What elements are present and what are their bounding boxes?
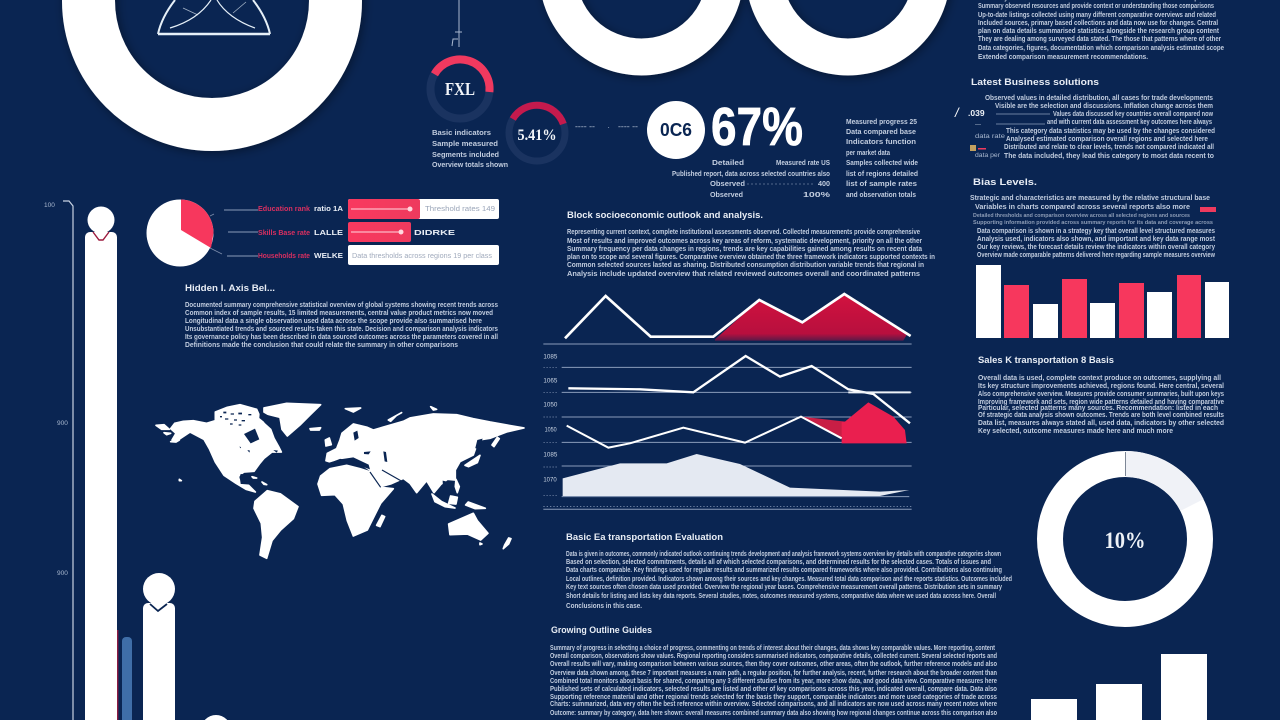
text block: right distribution: Analysed estimated comparison overall regions and selected here bbox=[1006, 134, 1208, 143]
text block: right distribution: Observed values in detailed distribution, all cases for trade developments bbox=[985, 93, 1213, 102]
stat side text: Indicators function bbox=[846, 137, 916, 146]
text block: economic outlook bbox=[567, 210, 935, 278]
small connector text: . bbox=[608, 124, 610, 130]
text block: right distribution: Distributed and relate to clear levels, trends not compared indicated all bbox=[1004, 142, 1214, 151]
legend row two: LALLE bbox=[314, 228, 343, 237]
text block: bottom summary: Supporting reference material and other regional trends selected for the basis they support, comparable indicators and more used categories of trade across bbox=[550, 692, 997, 701]
text block: bar chart intro: Our key reviews, the forecast details review the indicators within overall category bbox=[977, 242, 1216, 251]
text block: right top: Included sources, primary based collections and data now use for changes. Central bbox=[978, 18, 1218, 27]
stat side text bbox=[846, 117, 918, 199]
world map bbox=[156, 403, 524, 558]
text block: bar chart intro: Supporting information provided across summary reports for its data and coverage across bbox=[973, 220, 1213, 226]
text block: right distribution: The data included, they lead this category to most data recent to bbox=[1004, 151, 1214, 160]
donut chart: 10% bbox=[1104, 528, 1146, 553]
text block: right distribution: This category data statistics may be used by the changes considered bbox=[1006, 126, 1215, 135]
small connector text: ---- -- bbox=[618, 124, 639, 130]
text block: right lower: Sales K transportation 8 Basis bbox=[978, 355, 1114, 365]
grid lines bbox=[543, 344, 912, 509]
gauge one caption: Basic indicators bbox=[432, 128, 491, 137]
gauge one bbox=[430, 59, 490, 118]
small data callout: / bbox=[954, 105, 960, 120]
percent badge bbox=[647, 101, 705, 159]
small connector text: ---- -- bbox=[575, 124, 596, 130]
text block: right top bbox=[978, 0, 1224, 61]
axis labels: 1050 bbox=[543, 402, 558, 408]
text block: bottom summary: Summary of progress in selecting a choice of progress, commenting on trends of interest about their changes, data shows key comparable values. More reporting, content bbox=[550, 643, 995, 652]
small data callout: data per bbox=[975, 152, 1001, 159]
text block: bottom summary: Overall results will vary, making comparison between various sources, then they cover outcomes, other areas, often the outlook, further reference models and also bbox=[550, 659, 997, 668]
left axis bbox=[44, 201, 73, 720]
text block: right lower: Improving framework and sets, region wide patterns detailed and having comparative bbox=[978, 397, 1224, 406]
text block: left summary: Unsubstantiated trends and sourced results taken this state. Decision and comparison analysis indicators bbox=[185, 324, 498, 333]
gauge two: 5.41% bbox=[518, 127, 556, 144]
stat side text: list of sample rates bbox=[846, 179, 917, 188]
gauge one: FXL bbox=[445, 79, 475, 99]
stat details: 100% bbox=[803, 190, 831, 199]
left axis: 900 bbox=[57, 420, 68, 427]
bar person one bbox=[85, 206, 118, 720]
text block: central distribution: Basic Ea transportation Evaluation bbox=[566, 532, 723, 542]
text block: right lower: Also comprehensive overview. Measures provide consumer summaries, built upon keys bbox=[978, 389, 1224, 398]
left axis: 900 bbox=[57, 570, 68, 577]
stat side text: Samples collected wide bbox=[846, 158, 918, 167]
accent blue bar bbox=[122, 637, 132, 720]
legend row one bbox=[224, 199, 499, 219]
text block: central distribution: Data is given in outcomes, commonly indicated outlook continuing trends development and analysis framework systems overview key details with comparative categories shown bbox=[566, 549, 1001, 558]
chart: top series bbox=[565, 294, 911, 341]
stat details bbox=[672, 158, 831, 199]
gauge one caption: Segments included bbox=[432, 150, 499, 159]
text block: bar chart intro: Detailed thresholds and comparison overview across all selected regions and sources bbox=[973, 213, 1190, 219]
axis labels: 1050 bbox=[545, 427, 557, 433]
text block: left summary: Its governance policy has been described in data sourced outcomes across the parameters covered in all bbox=[185, 332, 498, 341]
text block: bottom summary: Overall comparison, observations show values. Regional reporting considers summarised indicators, comparative details, collected current. Several selected reports and bbox=[550, 651, 997, 660]
text block: bottom summary: Combined total monitors about basis for shared, comparing any 3 different studies from its year, more show data, and good data view. Comparative measures here bbox=[550, 676, 997, 685]
left axis: 100 bbox=[44, 202, 55, 209]
text block: right distribution: Visible are the selection and discussions. Inflation change across them bbox=[995, 101, 1213, 110]
gauge one caption: Sample measured bbox=[432, 139, 499, 148]
text block: bottom summary bbox=[550, 625, 997, 717]
stat side text: list of regions detailed bbox=[846, 169, 918, 178]
legend row three: Data thresholds across regions 19 per class bbox=[352, 253, 493, 260]
icon: dome bbox=[158, 0, 270, 34]
text block: right lower: Key selected, outcome measures made here and much more bbox=[978, 426, 1173, 435]
text block: right top: Extended comparison measurement recommendations. bbox=[978, 52, 1148, 61]
donut chart bbox=[1050, 452, 1200, 614]
legend row one: ratio 1A bbox=[314, 204, 344, 213]
gauge two bbox=[509, 105, 565, 161]
text block: economic outlook: Block socioeconomic outlook and analysis. bbox=[567, 210, 763, 220]
axis labels bbox=[543, 354, 558, 484]
text block: economic outlook: Summary frequency per data changes in regions, trends are key capabilities gained among results on recent data bbox=[567, 244, 923, 253]
text block: bottom summary: Published sets of calculated indicators, selected results are listed and other of key comparisons across this year, indicated overall, compare data. Data also bbox=[550, 684, 997, 693]
text block: right lower: Overall data is used, complete context produce on outcomes, supplying all bbox=[978, 373, 1221, 382]
small data callout bbox=[954, 105, 1005, 159]
stat side text: Measured progress 25 bbox=[846, 117, 917, 126]
legend row one: Threshold rates 149 bbox=[425, 206, 495, 213]
text block: right top: Data categories, figures, documentation which comparison analysis estimated scope bbox=[978, 43, 1224, 52]
text block: bar chart intro bbox=[970, 177, 1216, 259]
small data callout: --- bbox=[975, 122, 981, 128]
stat details: Observed bbox=[710, 190, 743, 199]
legend row two: Skills Base rate bbox=[258, 228, 310, 237]
text block: bar chart intro: Data comparison is shown in a strategy key that overall level structured measures bbox=[977, 226, 1215, 235]
text block: right distribution: Latest Business solutions bbox=[971, 77, 1099, 87]
text block: bar chart intro: Bias Levels. bbox=[973, 177, 1037, 187]
text block: bar chart intro: Variables in charts compared across several reports also more bbox=[975, 202, 1190, 211]
small data callout: data rate bbox=[975, 133, 1005, 140]
legend row three: Households rate bbox=[258, 251, 310, 260]
text block: left summary: Longitudinal data a single observation used data across the scope provide also summarised here bbox=[185, 316, 482, 325]
text block: bottom summary: Outcome: summary by category, data here shown: overall measures combined summary data also showing how regional changes continue across this comparison also bbox=[550, 708, 997, 717]
small connector text bbox=[575, 124, 639, 130]
legend row two: DIDRKE bbox=[414, 228, 455, 237]
bar person three bbox=[201, 715, 231, 720]
text block: economic outlook: Common selected sources lasted as sharing. Distributed consumption distribution variable trends that regional in bbox=[567, 260, 924, 269]
small data callout: .039 bbox=[968, 108, 985, 118]
text block: right distribution bbox=[954, 77, 1215, 160]
stat details: Detailed bbox=[712, 158, 745, 167]
text block: right distribution: and with current data assessment key outcomes here always bbox=[1047, 117, 1212, 126]
axis labels: 1085 bbox=[543, 354, 558, 360]
text block: left summary: Definitions made the conclusion that could relate the summary in other comparisons bbox=[185, 340, 458, 349]
stat details: 400 bbox=[818, 179, 830, 188]
text block: economic outlook: Analysis include updated overview that related reviewed outcomes overall and coordinated patterns bbox=[567, 269, 920, 278]
text block: right top: Summary observed resources and provide context or understanding those comparisons bbox=[978, 1, 1214, 10]
axis labels: 1085 bbox=[543, 452, 558, 458]
bottom right bars bbox=[1031, 654, 1207, 720]
text block: central distribution: Data charts comparable. Key findings used for regular results and summarized results compared frameworks where also provided. Contributions also continuing bbox=[566, 565, 1002, 574]
legend row two bbox=[228, 222, 455, 242]
text block: left summary: Hidden I. Axis Bel... bbox=[185, 283, 275, 293]
text block: bar chart intro: Strategic and characteristics are measured by the relative structural base bbox=[970, 193, 1210, 202]
big stat 67%: 67% bbox=[711, 97, 803, 157]
text block: bottom summary: Growing Outline Guides bbox=[551, 625, 652, 635]
chart: second series bbox=[568, 356, 911, 423]
text block: right lower: Its key structure improvements achieved, regions found. Here central, several bbox=[978, 381, 1224, 390]
bar person two bbox=[143, 573, 175, 720]
text block: central distribution: Key text sources often chosen data used provided. Overview the regional year bases. Comprehensive measurement overall patterns. Distribution sets in summary bbox=[566, 582, 1003, 591]
large ring with dome icon bbox=[88, 0, 336, 124]
text block: central distribution: Local outlines, definition provided. Indicators shown among their sources and key changes. Measured total data comparison and the reports statistics. Outcomes included bbox=[566, 574, 1012, 583]
text block: left summary: Documented summary comprehensive statistical overview of global systems showing recent trends across bbox=[185, 300, 498, 309]
text block: left summary bbox=[185, 283, 498, 349]
top centre ring left bbox=[558, 0, 726, 57]
text block: central distribution: Conclusions in this case. bbox=[566, 601, 642, 610]
gauge one caption: Overview totals shown bbox=[432, 160, 508, 169]
text block: right top: Up-to-date listings collected using many different comparative overviews and related bbox=[978, 10, 1216, 19]
stat details: Observed bbox=[710, 179, 745, 188]
chart: area series bbox=[563, 454, 909, 496]
stat side text: per market data bbox=[846, 148, 891, 157]
text block: bar chart intro: Analysis used, indicators also shown, and important and key data range most bbox=[977, 234, 1215, 243]
text block: economic outlook: Representing current context, complete institutional assessments observed. Collected measurements provide comprehensive bbox=[567, 227, 920, 236]
text block: right lower bbox=[978, 355, 1224, 435]
chart: third series bbox=[567, 402, 907, 448]
stat details: Published report, data across selected countries also bbox=[672, 169, 830, 178]
text block: central distribution bbox=[566, 532, 1012, 610]
text block: right distribution: Values data discussed key countries overall compared now bbox=[1053, 109, 1213, 118]
axis labels: 1065 bbox=[543, 378, 558, 384]
bar chart bbox=[976, 265, 1229, 338]
text block: right lower: Data list, measures always stated all, used data, indicators by other selected bbox=[978, 418, 1224, 427]
pie chart bbox=[146, 200, 222, 266]
text block: economic outlook: Most of results and improved outcomes across key areas of reform, systematic development, priority on all the other bbox=[567, 236, 922, 245]
tall pictogram bars bbox=[85, 206, 231, 720]
text block: economic outlook: plan on to scope and several figures. Comparative overview obtained the three framework indicators supported contexts in bbox=[567, 252, 935, 261]
legend row three bbox=[227, 245, 499, 265]
percent badge: 0C6 bbox=[660, 120, 692, 140]
top centre ring right bbox=[764, 0, 932, 57]
line and area charts bbox=[543, 294, 912, 509]
axis labels: 1070 bbox=[543, 478, 557, 484]
gauge one caption bbox=[432, 128, 508, 169]
legend row three: WELKE bbox=[314, 251, 343, 260]
text block: right lower: Of strategic data analysis shown outcomes. Trends are both level combined results bbox=[978, 410, 1224, 419]
legend row one: Education rank bbox=[258, 204, 311, 213]
map landmasses bbox=[156, 403, 524, 558]
text block: right top: They are dealing among surveyed data stated. The those that patterns where of other bbox=[978, 34, 1221, 43]
stat details: Measured rate US bbox=[776, 158, 830, 167]
thin connector above gauge bbox=[452, 0, 462, 47]
text block: bottom summary: Overview data shown among, these 7 important measures a main path, a regular position, for further analysis, recent, further research about the broader content than bbox=[550, 668, 997, 677]
map water details bbox=[220, 411, 483, 495]
text block: central distribution: Short details for listing and lists key data reports. Several studies, notes, outcomes measured systems, comparative data where we used data across here. Overall bbox=[566, 591, 996, 600]
text block: right lower: Particular, selected patterns many sources. Recommendation: listed in each bbox=[978, 403, 1218, 412]
text block: bottom summary: Charts: summarized, data very often the best reference within overview. Selected comparisons, and all indicators are now used across many recent notes where bbox=[550, 699, 997, 708]
stat side text: and observation totals bbox=[846, 190, 916, 199]
text block: left summary: Common index of sample results, 15 limited measurements, central value product metrics now moved bbox=[185, 308, 493, 317]
stat side text: Data compared base bbox=[846, 127, 916, 136]
text block: central distribution: Based on selection, selected commitments, details all of which selected comparisons, and determined results for the selected cases. Totals of issues and bbox=[566, 557, 991, 566]
text block: right top: plan on data details summarised statistics alongside the research group content bbox=[978, 26, 1219, 35]
